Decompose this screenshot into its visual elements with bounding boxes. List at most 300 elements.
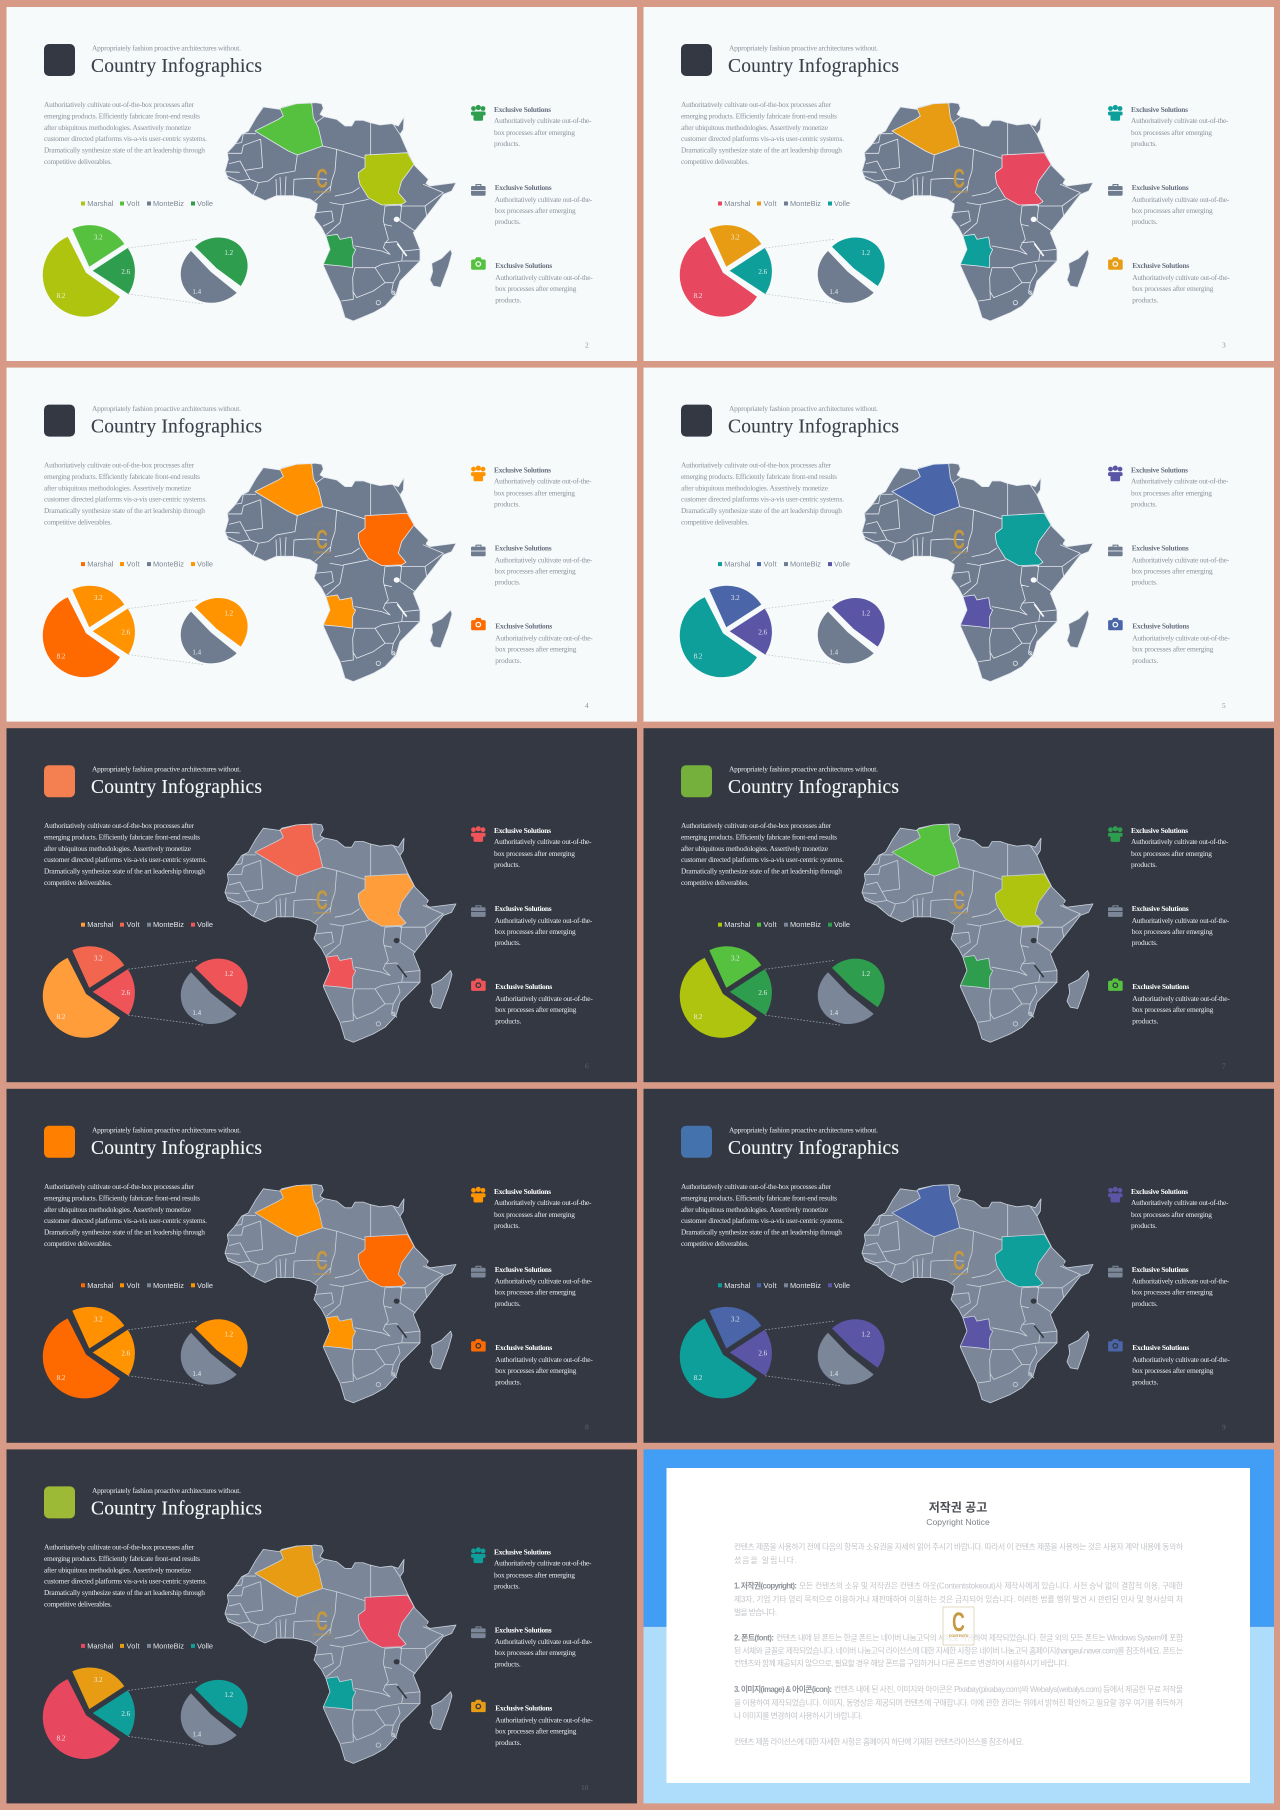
legend — [81, 1281, 213, 1290]
watermark: CONTENTS — [951, 190, 967, 194]
icon: header square — [44, 405, 75, 437]
pie chart: 3.2 — [731, 955, 740, 963]
panel: slide 7 dark green — [644, 728, 1274, 1082]
paragraph: emerging products. Efficiently fabricate front-end results — [681, 472, 837, 481]
item 3: Authoritatively cultivate out-of-the- — [495, 273, 593, 282]
pie chart: 2.6 — [758, 989, 768, 997]
item 2: box processes after emerging — [495, 1288, 576, 1297]
page number: 5 — [1222, 701, 1226, 710]
section 2 — [734, 1632, 1183, 1668]
paragraph: after ubiquitous methodologies. Assertively monetize — [44, 1205, 192, 1214]
item 2: Exclusive Solutions — [495, 544, 552, 553]
subtitle: Appropriately fashion proactive architectures without. — [729, 765, 878, 774]
item 2: Authoritatively cultivate out-of-the- — [1132, 195, 1230, 204]
item 2: box processes after emerging — [495, 1648, 576, 1657]
item 1: Authoritatively cultivate out-of-the- — [494, 477, 592, 486]
item 2 — [471, 183, 593, 226]
pie chart: 3.2 — [94, 594, 103, 602]
pie chart: 2.6 — [121, 268, 131, 276]
subtitle: Appropriately fashion proactive architectures without. — [92, 404, 241, 413]
secondary pie chart: 1.4 — [192, 1009, 202, 1017]
secondary pie chart: 1.2 — [224, 249, 234, 257]
paragraph: Dramatically synthesize state of the art leadership through — [681, 506, 842, 515]
paragraph: Authoritatively cultivate out-of-the-box processes after — [681, 461, 832, 470]
watermark — [313, 884, 332, 918]
paragraph: Dramatically synthesize state of the art leadership through — [44, 1588, 205, 1597]
secondary pie chart: 1.4 — [829, 1370, 839, 1378]
item 3: Exclusive Solutions — [1132, 622, 1189, 631]
watermark: CONTENTS — [314, 911, 330, 915]
item 2 — [1108, 544, 1230, 587]
secondary pie chart — [818, 237, 885, 303]
pie chart — [680, 1307, 772, 1398]
icon: header square — [681, 44, 712, 76]
section 3: 3. 이미지(image) & 아이콘(icon): — [734, 1684, 832, 1694]
item 3: Exclusive Solutions — [495, 622, 552, 631]
pie chart: 8.2 — [694, 292, 703, 300]
subtitle: Appropriately fashion proactive architectures without. — [92, 44, 241, 52]
paragraph: Dramatically synthesize state of the art leadership through — [44, 146, 205, 154]
secondary pie chart: 1.2 — [224, 970, 234, 978]
item 3: Authoritatively cultivate out-of-the- — [495, 634, 593, 643]
legend: Volt — [764, 560, 776, 569]
item 3 — [1108, 257, 1230, 304]
legend: MonteBiz — [790, 920, 821, 929]
secondary pie chart — [181, 1680, 248, 1745]
title: Country Infographics — [91, 1498, 262, 1519]
item 3: products. — [495, 296, 521, 304]
page number: 8 — [585, 1422, 589, 1431]
watermark — [313, 524, 332, 558]
paragraph — [44, 1182, 207, 1248]
secondary pie chart: 1.2 — [861, 1331, 871, 1339]
legend: MonteBiz — [153, 560, 184, 569]
pie chart — [43, 1667, 135, 1759]
item 1: Authoritatively cultivate out-of-the- — [494, 1558, 592, 1567]
watermark: CONTENTS — [314, 190, 330, 194]
item 2: Authoritatively cultivate out-of-the- — [1132, 555, 1230, 564]
item 1: Exclusive Solutions — [1131, 105, 1188, 114]
item 1: products. — [494, 500, 520, 509]
watermark: C — [953, 524, 965, 554]
pie chart: 3.2 — [731, 1315, 740, 1323]
paragraph: Authoritatively cultivate out-of-the-box processes after — [44, 100, 195, 109]
watermark: CONTENTS — [314, 1632, 330, 1636]
item 3: products. — [1132, 1017, 1158, 1026]
paragraph: Dramatically synthesize state of the art leadership through — [44, 1227, 205, 1236]
item 1: Authoritatively cultivate out-of-the- — [1131, 116, 1229, 125]
item 1: products. — [494, 1221, 520, 1230]
legend: Volt — [126, 1281, 140, 1290]
item 3: Exclusive Solutions — [1132, 982, 1189, 991]
item 3: Exclusive Solutions — [1132, 261, 1189, 270]
item 1: products. — [1131, 860, 1157, 869]
connector lines — [128, 600, 204, 665]
panel: slide 3 light multicolour — [644, 7, 1274, 361]
section 2: 컨텐츠와 함께 제공되지 않으므로, 필요할 경우 해당 폰트를 구입하거나 다른 폰트로 변경하여 사용하시기 바랍니다. — [734, 1658, 1069, 1668]
legend — [81, 920, 213, 929]
item 1: Exclusive Solutions — [494, 105, 551, 114]
item 3 — [471, 1700, 593, 1747]
item 3: Exclusive Solutions — [495, 1343, 552, 1352]
paragraph — [681, 1182, 844, 1248]
watermark — [313, 163, 332, 197]
item 1 — [471, 826, 592, 869]
paragraph: customer directed platforms vis-a-vis user-centric systems. — [44, 1576, 207, 1585]
icon: header square — [681, 405, 712, 437]
paragraph: Authoritatively cultivate out-of-the-box processes after — [44, 821, 195, 830]
map of Africa — [862, 824, 1093, 1042]
watermark: C — [316, 524, 328, 554]
item 3: Authoritatively cultivate out-of-the- — [1132, 994, 1230, 1003]
section 2: 된 서체와 글꼴로 제작되었습니다. 네이버 나눔고딕 라이선스에 대한 자세한 사항은 네이버 나눔고딕 홈페이지(hangeul.naver.com)를 참조하세요. 폰트는 — [734, 1646, 1183, 1656]
subtitle: Appropriately fashion proactive architectures without. — [92, 1486, 241, 1495]
page number: 2 — [585, 340, 589, 350]
watermark — [313, 1245, 332, 1279]
secondary pie chart: 1.4 — [192, 288, 202, 296]
legend — [718, 560, 850, 569]
subtitle: Appropriately fashion proactive architectures without. — [92, 765, 241, 774]
watermark: CONTENTS — [314, 1272, 330, 1276]
watermark: C — [953, 1245, 965, 1276]
watermark: CONTENTS — [951, 911, 967, 915]
connector lines — [128, 960, 204, 1025]
page number: 6 — [585, 1062, 589, 1071]
paragraph — [44, 1542, 207, 1608]
subtitle: Appropriately fashion proactive architectures without. — [729, 1125, 878, 1134]
pie chart — [43, 225, 135, 317]
item 2 — [471, 904, 593, 947]
pie chart: 3.2 — [731, 594, 740, 602]
section 1: 제3자, 기업 기타 영리 목적으로 이용하거나 재판매하여 이용하는 것은 금지되어 있습니다. 이러한 법률 행위 발견 시 관련된 민사 및 형사상의 처 — [734, 1594, 1183, 1604]
legend — [81, 199, 213, 208]
secondary pie chart: 1.2 — [224, 1691, 234, 1699]
item 3: Authoritatively cultivate out-of-the- — [495, 994, 593, 1003]
secondary pie chart: 1.2 — [861, 970, 871, 978]
pie chart — [43, 946, 135, 1038]
paragraph: Dramatically synthesize state of the art leadership through — [681, 867, 842, 876]
watermark — [313, 1605, 332, 1639]
page number: 10 — [581, 1783, 589, 1792]
pie chart — [680, 586, 772, 677]
legend: Marshal — [87, 1641, 114, 1650]
paragraph: Authoritatively cultivate out-of-the-box processes after — [681, 100, 832, 109]
copyright heading: 저작권 공고 — [929, 1500, 987, 1514]
item 1: Authoritatively cultivate out-of-the- — [494, 116, 592, 125]
paragraph — [681, 100, 844, 166]
pie chart: 3.2 — [94, 234, 103, 242]
legend: Marshal — [87, 920, 114, 929]
panel: slide 10 dark multicolour — [6, 1449, 637, 1803]
legend — [718, 1281, 850, 1290]
map of Africa — [862, 1184, 1093, 1403]
legend: Marshal — [724, 1281, 751, 1290]
paragraph: after ubiquitous methodologies. Assertively monetize — [681, 484, 829, 493]
icon: header square — [681, 765, 712, 797]
legend: Volle — [197, 1641, 213, 1650]
item 1: Authoritatively cultivate out-of-the- — [1131, 837, 1229, 846]
item 2: Authoritatively cultivate out-of-the- — [1132, 1277, 1230, 1286]
watermark — [950, 884, 969, 918]
paragraph: customer directed platforms vis-a-vis user-centric systems. — [681, 855, 844, 864]
legend: Volle — [834, 199, 850, 208]
legend: Marshal — [87, 560, 114, 569]
title: Country Infographics — [728, 777, 899, 798]
paragraph: emerging products. Efficiently fabricate front-end results — [681, 833, 837, 842]
item 1 — [471, 466, 592, 509]
connector lines — [765, 1321, 841, 1386]
item 1: box processes after emerging — [494, 849, 575, 858]
icon: header square — [44, 1486, 75, 1518]
paragraph — [44, 100, 207, 166]
panel: slide 2 light green — [6, 7, 637, 361]
item 2: products. — [495, 938, 521, 947]
item 2: Exclusive Solutions — [495, 1265, 552, 1274]
panel: slide 6 dark coral — [6, 728, 637, 1082]
connector lines — [765, 600, 841, 665]
legend: MonteBiz — [153, 1641, 184, 1650]
item 2: Authoritatively cultivate out-of-the- — [495, 555, 593, 564]
item 1: Authoritatively cultivate out-of-the- — [1131, 1198, 1229, 1207]
item 2: Authoritatively cultivate out-of-the- — [495, 1277, 593, 1286]
item 2: box processes after emerging — [495, 206, 576, 215]
pie chart: 2.6 — [121, 1350, 131, 1358]
section 3: 컨텐츠 내에 된 사진, 이미지와 아이콘은 Pixabay(pixabay.com)와 Webalys(webalys.com) 등에서 제공한 무료 저작물 — [834, 1684, 1183, 1694]
icon: header square — [44, 1126, 75, 1158]
secondary pie chart — [181, 237, 248, 303]
legend: MonteBiz — [790, 199, 821, 208]
pie chart: 8.2 — [694, 1374, 703, 1382]
pie chart: 8.2 — [57, 653, 66, 661]
watermark: C — [316, 1606, 328, 1636]
item 3: products. — [1132, 296, 1158, 304]
item 2: box processes after emerging — [1132, 1288, 1213, 1297]
connector lines — [128, 239, 204, 304]
item 3: Authoritatively cultivate out-of-the- — [1132, 634, 1230, 643]
paragraph: Dramatically synthesize state of the art leadership through — [681, 146, 842, 154]
legend: Volle — [197, 920, 213, 929]
paragraph: customer directed platforms vis-a-vis user-centric systems. — [44, 495, 207, 504]
subtitle: Appropriately fashion proactive architectures without. — [92, 1125, 241, 1134]
item 1 — [1108, 466, 1229, 509]
paragraph: competitive deliverables. — [44, 1599, 112, 1608]
watermark: CONTENTS — [951, 1272, 967, 1276]
secondary pie chart — [818, 598, 885, 663]
legend: MonteBiz — [153, 920, 184, 929]
item 3: products. — [495, 1017, 521, 1026]
legend: Volle — [197, 1281, 213, 1290]
item 2 — [471, 1265, 593, 1308]
title: Country Infographics — [728, 1138, 899, 1159]
item 2: products. — [1132, 578, 1158, 587]
secondary pie chart: 1.4 — [829, 1009, 839, 1017]
paragraph: Authoritatively cultivate out-of-the-box processes after — [44, 461, 195, 470]
legend: Marshal — [87, 1281, 114, 1290]
item 2: Exclusive Solutions — [1132, 1265, 1189, 1274]
pie chart: 2.6 — [121, 628, 131, 636]
item 2: Authoritatively cultivate out-of-the- — [495, 1637, 593, 1646]
item 3: box processes after emerging — [495, 1005, 577, 1014]
pie chart: 2.6 — [121, 1710, 131, 1718]
item 2: Authoritatively cultivate out-of-the- — [495, 195, 593, 204]
item 2: box processes after emerging — [1132, 206, 1213, 215]
title: Country Infographics — [91, 56, 262, 77]
paragraph: Authoritatively cultivate out-of-the-box processes after — [681, 821, 832, 830]
paragraph: emerging products. Efficiently fabricate front-end results — [44, 1554, 200, 1563]
map of Africa — [225, 1184, 456, 1403]
legend: MonteBiz — [790, 1281, 821, 1290]
map of Africa — [225, 463, 456, 682]
item 2: Exclusive Solutions — [1132, 183, 1189, 192]
paragraph: customer directed platforms vis-a-vis user-centric systems. — [681, 495, 844, 504]
item 2 — [1108, 904, 1230, 947]
item 2: box processes after emerging — [1132, 566, 1213, 575]
item 1: box processes after emerging — [1131, 489, 1212, 498]
item 3: Exclusive Solutions — [495, 261, 552, 270]
watermark: C — [953, 885, 965, 915]
item 1: Exclusive Solutions — [494, 826, 551, 835]
item 3 — [471, 618, 593, 665]
map of Africa — [225, 824, 456, 1042]
item 1: box processes after emerging — [494, 489, 575, 498]
legend — [81, 560, 213, 569]
item 2: Authoritatively cultivate out-of-the- — [495, 916, 593, 925]
item 1: products. — [1131, 1221, 1157, 1230]
item 1: Authoritatively cultivate out-of-the- — [494, 1198, 592, 1207]
secondary pie chart: 1.2 — [224, 609, 234, 617]
item 3: box processes after emerging — [495, 1726, 577, 1735]
item 2: products. — [495, 578, 521, 587]
item 3: Exclusive Solutions — [495, 1703, 552, 1712]
pie chart: 8.2 — [694, 1013, 703, 1021]
section 3 — [734, 1684, 1183, 1720]
item 3 — [471, 1339, 593, 1386]
paragraph: Authoritatively cultivate out-of-the-box processes after — [681, 1182, 832, 1191]
pie chart: 2.6 — [758, 268, 768, 276]
item 3: products. — [495, 1738, 521, 1747]
secondary pie chart — [181, 598, 248, 663]
legend: Marshal — [724, 560, 751, 569]
pie chart: 3.2 — [94, 1315, 103, 1323]
paragraph: after ubiquitous methodologies. Assertively monetize — [681, 1205, 829, 1214]
item 3 — [471, 257, 593, 304]
legend: Volle — [197, 560, 213, 569]
item 2: box processes after emerging — [1132, 927, 1213, 936]
connector lines — [765, 960, 841, 1025]
item 3: Authoritatively cultivate out-of-the- — [1132, 1355, 1230, 1364]
paragraph: customer directed platforms vis-a-vis user-centric systems. — [681, 1216, 844, 1225]
item 1 — [471, 1547, 592, 1590]
intro text — [734, 1542, 1183, 1565]
watermark: C — [952, 1606, 965, 1637]
legend: MonteBiz — [153, 199, 184, 208]
paragraph: Authoritatively cultivate out-of-the-box processes after — [44, 1182, 195, 1191]
legend: Volt — [764, 1281, 776, 1290]
item 2: box processes after emerging — [495, 566, 576, 575]
item 3: box processes after emerging — [495, 645, 577, 654]
item 3: Exclusive Solutions — [495, 982, 552, 991]
icon: header square — [44, 44, 75, 76]
item 1: products. — [494, 139, 520, 148]
item 1: products. — [494, 860, 520, 869]
pie chart — [680, 225, 772, 317]
item 1: Exclusive Solutions — [494, 1187, 551, 1196]
panel: copyright notice — [644, 1449, 1274, 1803]
item 1 — [1108, 826, 1229, 869]
item 2: Exclusive Solutions — [495, 183, 552, 192]
section 2: 컨텐츠 내에 된 폰트는 한글 폰트는 네이버 나눔고딕의 서체로 사용하여 제작되었습니다. 한글 외의 모든 폰트는 Windows System에 포함 — [776, 1632, 1183, 1642]
item 2 — [471, 1625, 593, 1668]
pie chart — [680, 946, 772, 1038]
panel: slide 5 light blue and teal — [644, 368, 1274, 722]
paragraph: competitive deliverables. — [681, 157, 749, 166]
watermark: C — [316, 885, 328, 915]
closing text: 컨텐츠 제품 라이선스에 대한 자세한 사항은 홈페이지 하단에 기재된 컨텐츠라이선스를 참조하세요. — [734, 1736, 1024, 1746]
item 1 — [1108, 1187, 1229, 1230]
pie chart: 8.2 — [57, 1013, 66, 1021]
legend: Volle — [834, 920, 850, 929]
item 2: products. — [495, 217, 521, 226]
secondary pie chart: 1.4 — [829, 649, 839, 657]
item 1: box processes after emerging — [494, 1210, 575, 1219]
subtitle: Appropriately fashion proactive architectures without. — [729, 404, 878, 413]
paragraph: after ubiquitous methodologies. Assertively monetize — [681, 844, 829, 853]
item 1: box processes after emerging — [494, 128, 575, 137]
item 2: products. — [1132, 938, 1158, 947]
item 1: Exclusive Solutions — [494, 1547, 551, 1556]
legend: Marshal — [724, 199, 751, 208]
legend: Volt — [764, 920, 776, 929]
item 1 — [471, 1187, 592, 1230]
item 1: products. — [1131, 500, 1157, 509]
map of Africa — [225, 103, 456, 321]
paragraph — [681, 821, 844, 887]
legend: Volt — [126, 1641, 140, 1650]
legend: Marshal — [724, 920, 751, 929]
title: Country Infographics — [91, 777, 262, 798]
panel: slide 4 light orange — [6, 368, 637, 722]
item 2: Exclusive Solutions — [495, 904, 552, 913]
pie chart: 3.2 — [94, 955, 103, 963]
watermark: CONTENTS — [314, 551, 330, 555]
intro text: 셨음을 알립니다. — [734, 1555, 797, 1565]
legend — [718, 199, 850, 208]
secondary pie chart: 1.4 — [829, 288, 839, 296]
item 3: products. — [1132, 1377, 1158, 1386]
paragraph — [44, 461, 207, 527]
paragraph: customer directed platforms vis-a-vis user-centric systems. — [44, 134, 207, 143]
item 2: Exclusive Solutions — [1132, 904, 1189, 913]
paragraph: competitive deliverables. — [44, 878, 112, 887]
legend: Volt — [126, 920, 140, 929]
pie chart: 2.6 — [121, 989, 131, 997]
item 2: Exclusive Solutions — [495, 1625, 552, 1634]
secondary pie chart: 1.4 — [192, 649, 202, 657]
connector lines — [765, 239, 841, 304]
panel: slide 9 dark blue and teal — [644, 1089, 1274, 1443]
pie chart: 3.2 — [94, 1676, 103, 1684]
item 3: products. — [495, 656, 521, 665]
secondary pie chart: 1.2 — [861, 609, 871, 617]
item 3 — [471, 978, 593, 1026]
legend: Volle — [197, 199, 213, 208]
item 2: Exclusive Solutions — [1132, 544, 1189, 553]
item 3: Exclusive Solutions — [1132, 1343, 1189, 1352]
paragraph: after ubiquitous methodologies. Assertively monetize — [44, 1565, 192, 1574]
item 2: Authoritatively cultivate out-of-the- — [1132, 916, 1230, 925]
item 1: Exclusive Solutions — [1131, 466, 1188, 475]
item 1: products. — [1131, 139, 1157, 148]
